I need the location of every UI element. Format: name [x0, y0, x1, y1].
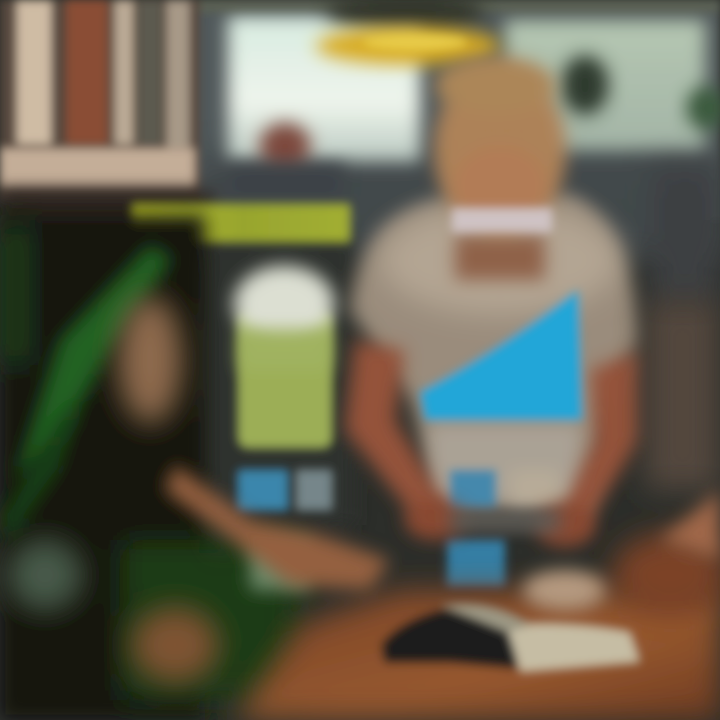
wooden table	[235, 590, 720, 720]
left arm	[345, 340, 450, 525]
blue labels under bottle	[238, 470, 332, 510]
ceiling lamp	[316, 0, 500, 65]
building facade top left	[0, 0, 215, 240]
head	[434, 66, 566, 234]
hands	[405, 500, 595, 547]
white band	[452, 208, 552, 232]
bottle panel frame	[200, 240, 355, 525]
child figure	[345, 55, 640, 535]
background room	[190, 0, 720, 305]
window: centre	[228, 16, 420, 161]
white cup on table	[523, 570, 607, 610]
right person hand	[612, 300, 720, 617]
open book	[382, 604, 640, 672]
outstretched arm	[165, 465, 390, 590]
distant figure	[225, 122, 345, 202]
window: right	[505, 20, 705, 150]
right arm	[560, 350, 640, 535]
neck	[455, 235, 545, 280]
bottle	[234, 266, 334, 448]
plant on the left	[0, 215, 310, 720]
blue chart triangle on shirt	[420, 290, 582, 420]
yellow-green banner	[132, 204, 350, 242]
small blue phone in hands	[447, 470, 560, 586]
dark plant top right	[686, 86, 720, 130]
shirt	[350, 195, 640, 510]
hair bun	[561, 55, 609, 115]
